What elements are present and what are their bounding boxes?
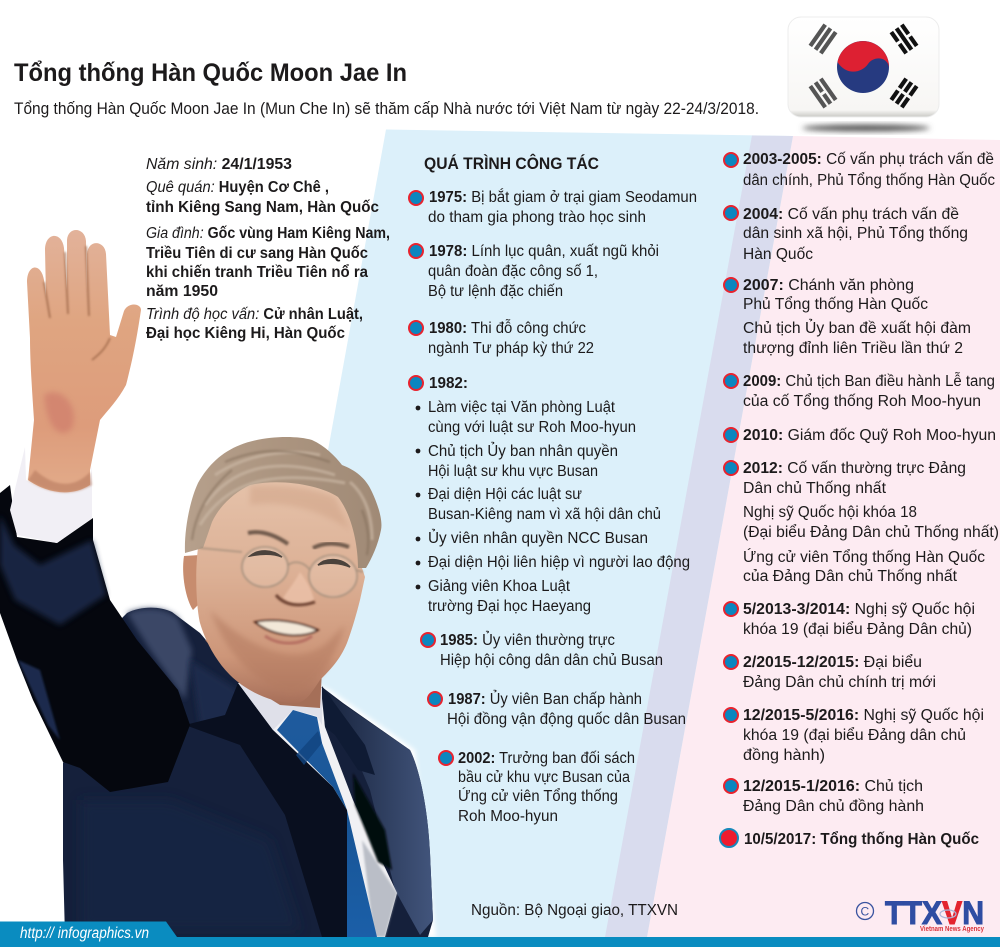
right dark shadow: [353, 773, 392, 870]
sleeve: [0, 485, 190, 792]
entry 12/2015-1/2016: Đảng Dân chủ đồng hành: [743, 798, 924, 815]
biography text block: Quê quán: Huyện Cơ Chê ,: [146, 179, 329, 196]
subtitle: Tổng thống Hàn Quốc Moon Jae In (Mun Che In) sẽ thăm cấp Nhà nước tới Việt Nam từ ngày 22-24/3/2018.: [14, 100, 759, 118]
entry 1980: 1980: Thi đỗ công chức: [429, 320, 586, 337]
entry 2003-2005: [724, 151, 995, 189]
right lapel edge: [322, 686, 375, 775]
raised hand: [27, 230, 141, 492]
entry 1982: Chủ tịch Ủy ban nhân quyền: [428, 442, 618, 460]
entry 2002: Ứng cử viên Tổng thống: [458, 788, 618, 805]
entry 1978: Bộ tư lệnh đặc chiến: [428, 283, 563, 300]
panel: blue background: [240, 130, 793, 937]
entry 2007: thượng đỉnh liên Triều lần thứ 2: [743, 340, 963, 357]
entry 2012: Ứng cử viên Tổng thống Hàn Quốc: [743, 549, 985, 566]
entry 1982: Hội luật sư khu vực Busan: [428, 463, 598, 480]
entry 1980: [409, 320, 594, 357]
nose: [283, 572, 314, 605]
face: [196, 470, 365, 703]
biography text block: Triều Tiên di cư sang Hàn Quốc: [146, 245, 368, 262]
cheek shading: [210, 610, 345, 695]
entry 1982: 1982:: [429, 375, 468, 392]
nose shadow: [276, 595, 315, 605]
entry 2007: Phủ Tổng thống Hàn Quốc: [743, 296, 928, 313]
hair dark strands: [192, 451, 368, 555]
hair: [185, 437, 381, 568]
biography text block: năm 1950: [146, 283, 218, 300]
upper chest highlight: [190, 660, 270, 730]
entry 2004: dân sinh xã hội, Phủ Tổng thống: [743, 225, 968, 242]
entry 1982: Ủy viên nhân quyền NCC Busan: [428, 529, 648, 547]
logo: TTXVN: TTXVN: [885, 895, 984, 931]
entry 2009: 2009: Chủ tịch Ban điều hành Lễ tang: [743, 373, 995, 390]
body left highlight: [80, 800, 300, 930]
entry 12/2015-5/2016: [724, 707, 984, 764]
shirt cuff: [10, 447, 92, 543]
entry 1982: Giảng viên Khoa Luật: [428, 578, 571, 595]
entry 1978: 1978: Lính lục quân, xuất ngũ khỏi: [429, 243, 659, 260]
jacket shoulder highlight: [127, 609, 192, 700]
entry 12/2015-1/2016: [724, 778, 924, 815]
biography text block: tỉnh Kiêng Sang Nam, Hàn Quốc: [146, 199, 379, 216]
entry 2002: 2002: Trưởng ban đối sách: [458, 750, 635, 767]
entry 2012: Nghị sỹ Quốc hội khóa 18: [743, 504, 917, 521]
entry 2009: của cố Tổng thống Roh Moo-hyun: [743, 393, 981, 410]
entry 2002: Roh Moo-hyun: [458, 808, 558, 825]
entry 2007: 2007: Chánh văn phòng: [743, 277, 914, 294]
entry 1982: cùng với luật sư Roh Moo-hyun: [428, 419, 636, 436]
lower lip: [265, 636, 312, 643]
entry 1978: [409, 243, 659, 300]
entry 2007: Chủ tịch Ủy ban đề xuất hội đàm: [743, 319, 971, 337]
entry 1985: 1985: Ủy viên thường trực: [440, 631, 615, 649]
jacket body: [63, 608, 433, 937]
wrist shading: [28, 470, 92, 492]
shirt shadow: [362, 840, 397, 937]
entry 1985: Hiệp hội công dân dân chủ Busan: [440, 652, 663, 669]
entry 12/2015-5/2016: khóa 19 (đại biểu Đảng dân chủ: [743, 727, 966, 744]
photo: Moon Jae In waving: [0, 230, 436, 937]
entry 2003-2005: dân chính, Phủ Tổng thống Hàn Quốc: [743, 172, 995, 189]
entry 2/2015-12/2015: Đảng Dân chủ chính trị mới: [743, 674, 936, 691]
forehead shadow: [250, 485, 350, 530]
icon: South Korea flag: [788, 17, 939, 132]
entry 1982: Làm việc tại Văn phòng Luật: [428, 399, 616, 416]
entry 1982: Busan-Kiêng nam vì xã hội dân chủ: [428, 506, 661, 523]
entry 12/2015-1/2016: 12/2015-1/2016: Chủ tịch: [743, 778, 923, 795]
logo: TTXVN: C: [860, 904, 870, 918]
entry 2004: 2004: Cố vấn phụ trách vấn đề: [743, 206, 959, 223]
entry 2012: (Đại biểu Đảng Dân chủ Thống nhất): [743, 524, 999, 541]
entry 2003-2005: 2003-2005: Cố vấn phụ trách vấn đề: [743, 151, 994, 168]
biography text block: khi chiến tranh Triều Tiên nổ ra: [146, 264, 368, 281]
finger creases: [44, 246, 110, 360]
entry 2007: [724, 277, 971, 357]
hand shading: [44, 392, 74, 433]
entry 12/2015-5/2016: 12/2015-5/2016: Nghị sỹ Quốc hội: [743, 707, 984, 724]
biography text block: Năm sinh: 24/1/1953: [146, 156, 292, 173]
footer bar: [0, 922, 1000, 947]
eyes: [250, 551, 350, 567]
entry 1978: quân đoàn đặc công số 1,: [428, 263, 598, 280]
entry 1975: [409, 189, 697, 226]
entry 2012: Dân chủ Thống nhất: [743, 480, 887, 497]
heading: career: QUÁ TRÌNH CÔNG TÁC: [424, 154, 599, 173]
entry 1987: Hội đồng vận động quốc dân Busan: [447, 711, 686, 728]
entry 2012: [724, 460, 999, 585]
entry 2002: [439, 750, 635, 825]
entry 2012: 2012: Cố vấn thường trực Đảng: [743, 460, 966, 477]
collar: [238, 683, 322, 730]
entry 1975: 1975: Bị bắt giam ở trại giam Seodamun: [429, 189, 697, 206]
entry 2009: [724, 373, 995, 410]
entry 2002: bầu cử khu vực Busan của: [458, 769, 630, 786]
logo: TTXVN: Vietnam News Agency: [920, 924, 985, 933]
entry 1985: [421, 631, 663, 669]
entry 1987: 1987: Ủy viên Ban chấp hành: [448, 690, 642, 708]
entry 1982: Đại diện Hội các luật sư: [428, 486, 582, 503]
entry 2/2015-12/2015: [724, 654, 936, 691]
entry 1982: Đại diện Hội liên hiệp vì người lao động: [428, 554, 690, 571]
entry 5/2013-3/2014: 5/2013-3/2014: Nghị sỹ Quốc hội: [743, 601, 975, 618]
panel: pink background: [647, 136, 1000, 937]
entry 1980: ngành Tư pháp kỳ thứ 22: [428, 340, 594, 357]
source note: Nguồn: Bộ Ngoại giao, TTXVN: [471, 902, 678, 919]
entry 10/5/2017: 10/5/2017: Tổng thống Hàn Quốc: [744, 831, 979, 848]
soft white halo: [0, 231, 436, 937]
biography text block: Đại học Kiêng Hi, Hàn Quốc: [146, 325, 345, 342]
entry 2/2015-12/2015: 2/2015-12/2015: Đại biểu: [743, 654, 922, 671]
sleeve edge highlight: [18, 660, 60, 740]
footer link: http:// infographics.vn: [20, 925, 149, 942]
entry 5/2013-3/2014: khóa 19 (đại biểu Đảng Dân chủ): [743, 621, 972, 638]
glasses: [200, 547, 363, 597]
entry 1982: [409, 375, 690, 615]
biography text block: Gia đình: Gốc vùng Ham Kiêng Nam,: [146, 225, 390, 242]
entry 1982: trường Đại học Haeyang: [428, 598, 591, 615]
biography text block: [146, 156, 390, 342]
shirt: [238, 680, 397, 937]
eyebrows: [248, 532, 288, 544]
entry 12/2015-5/2016: đồng hành): [743, 747, 825, 764]
right jacket shoulder: [330, 695, 433, 935]
entry 2010: 2010: Giám đốc Quỹ Roh Moo-hyun: [743, 427, 996, 444]
left lapel dark: [185, 683, 347, 937]
sleeve highlight: [0, 515, 106, 625]
ear: [183, 555, 203, 610]
entry 2012: của Đảng Dân chủ Thống nhất: [743, 568, 958, 585]
entry 5/2013-3/2014: [724, 601, 975, 638]
entry 1987: [428, 690, 686, 728]
title: Tổng thống Hàn Quốc Moon Jae In: [14, 59, 407, 87]
entry 2004: [724, 206, 968, 263]
hair strands: [200, 452, 372, 540]
mouth: [255, 620, 318, 635]
tie: [277, 710, 377, 937]
tie knot shadow: [296, 731, 322, 765]
neck: [205, 640, 322, 708]
biography text block: Trình độ học vấn: Cử nhân Luật,: [146, 306, 363, 323]
panel: overlap band: [605, 136, 793, 937]
entry 2004: Hàn Quốc: [743, 246, 813, 263]
entry 1975: do tham gia phong trào học sinh: [428, 209, 646, 226]
